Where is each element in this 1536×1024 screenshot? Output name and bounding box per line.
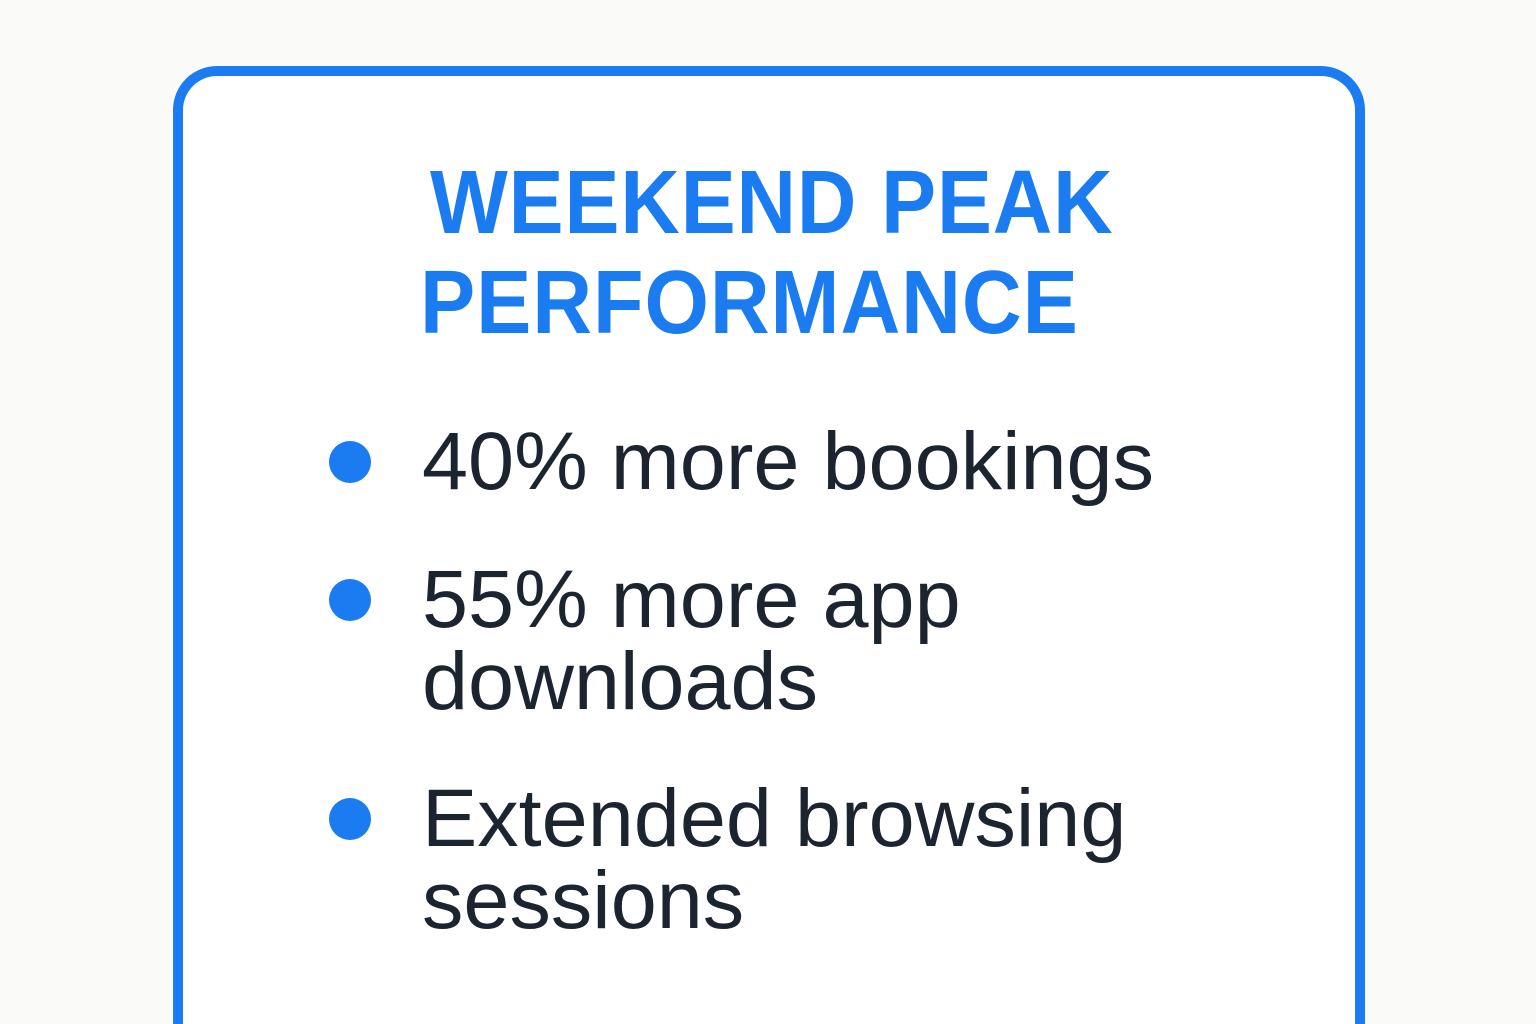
text: 55% more app downloads: downloads xyxy=(422,636,818,727)
icon: bullet dot xyxy=(329,441,371,483)
icon: bullet dot xyxy=(329,798,371,840)
text: Extended browsing sessions: sessions xyxy=(422,855,744,946)
text: 55% more app downloads: 55% more app xyxy=(422,554,961,645)
bullet list xyxy=(329,416,1154,946)
text: 40% more bookings: 40% more bookings xyxy=(422,416,1154,507)
bullet 3 xyxy=(329,773,1126,946)
text: Extended browsing sessions: Extended browsing xyxy=(422,773,1126,864)
bullet 2 xyxy=(329,554,961,727)
text: 55% more app downloads xyxy=(422,554,961,727)
title line 1: WEEKEND PEAK xyxy=(430,153,1114,253)
bullet 1 xyxy=(329,416,1154,507)
panel: card xyxy=(173,66,1365,1024)
title xyxy=(420,153,1114,353)
icon: bullet dot xyxy=(329,579,371,621)
title line 2: PERFORMANCE xyxy=(420,253,1079,353)
text: Extended browsing sessions xyxy=(422,773,1126,946)
